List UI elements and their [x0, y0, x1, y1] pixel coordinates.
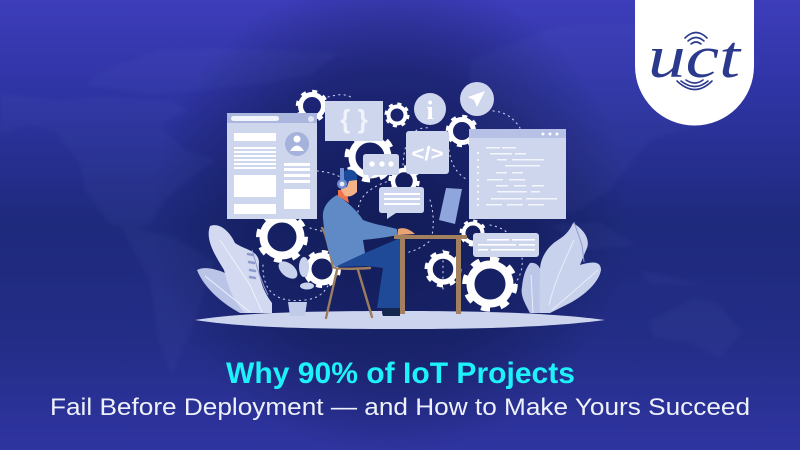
info icon: [414, 93, 446, 125]
torso: [323, 195, 398, 267]
desk: [394, 235, 467, 314]
left profile window: [227, 113, 317, 219]
code box: [406, 131, 449, 174]
logo text: uct: [648, 24, 742, 90]
gear: left small: [305, 252, 339, 286]
gear: top left: [298, 92, 326, 120]
info icon: i: [426, 96, 434, 125]
neck and face: [338, 190, 349, 203]
code box: </>: [412, 144, 444, 165]
headset: [340, 168, 344, 181]
logo signal waves: [677, 32, 712, 90]
gear: large right: [465, 259, 515, 309]
chat bubble: dots: [363, 154, 399, 179]
chat bubble: lines: [379, 187, 424, 219]
leaves: near small gear: [275, 257, 314, 290]
plant pot: [288, 302, 307, 316]
person at desk: [322, 168, 415, 318]
gear: behind chat: [347, 134, 393, 180]
title: Why 90% of IoT Projects: [226, 357, 575, 390]
world map silhouette: [0, 22, 760, 375]
hand: [398, 228, 415, 235]
connecting dotted lines: [263, 95, 522, 303]
plant: left: [197, 225, 272, 313]
shoe: [382, 308, 400, 316]
plant: right: [522, 222, 601, 313]
gear: top centre: [386, 104, 408, 126]
gear: left large: [258, 214, 306, 260]
curly braces box: [325, 101, 383, 141]
legs: [335, 238, 400, 308]
monitor: [439, 188, 462, 224]
subtitle: Fail Before Deployment — and How to Make Yours Succeed: [50, 394, 750, 421]
floor ellipse: [195, 311, 605, 329]
chat bubble: desk: [473, 233, 539, 257]
gear: desk bottom: [426, 252, 460, 286]
gear: desk top: [461, 221, 485, 245]
send icon: [460, 82, 494, 116]
logo badge: [635, 0, 754, 126]
curly braces box: { }: [340, 104, 368, 134]
hair: [340, 170, 357, 188]
right code window: [469, 129, 566, 219]
chair: [322, 228, 372, 318]
gear: right of info: [448, 116, 476, 146]
gear: under code box: [390, 167, 418, 195]
